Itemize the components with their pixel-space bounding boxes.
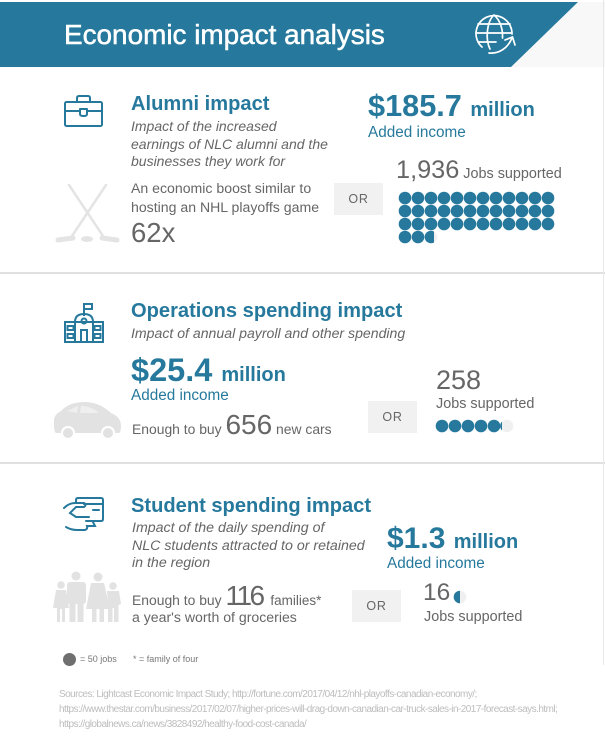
comparison text: Enough to buy 656 new cars: [132, 409, 332, 440]
title: Economic impact analysis: [64, 19, 385, 50]
or badge: [352, 590, 401, 622]
heading: Student spending impact: [131, 495, 371, 517]
stat: jobs count: 258: [436, 365, 481, 395]
description: businesses they work for: [131, 153, 285, 169]
icon: globe with arrow: [475, 14, 516, 54]
stat: jobs count: 16: [423, 579, 450, 606]
icon: car: [54, 402, 121, 438]
legend text: = 50 jobs: [80, 654, 117, 664]
footnote: * = family of four: [133, 654, 198, 664]
label: added income: Added income: [387, 555, 485, 572]
icon: school building: [64, 303, 104, 343]
description: Impact of annual payroll and other spending: [131, 325, 405, 341]
comparison text: An economic boost similar to: [131, 180, 311, 196]
or badge: OR: [348, 192, 369, 206]
header banner: [0, 2, 578, 67]
sources: [59, 689, 557, 730]
stat: added income: $25.4 million: [131, 352, 286, 388]
description: in the region: [132, 555, 210, 571]
description: [131, 118, 328, 169]
comparison text line two: a year's worth of groceries: [132, 609, 297, 625]
description: earnings of NLC alumni and the: [131, 136, 328, 152]
dot chart: jobs: [454, 590, 466, 604]
icon: hockey sticks: [56, 184, 120, 242]
icon: hand with card: [63, 497, 104, 531]
panel: alumni impact: [56, 88, 562, 248]
stat: 62x: 62x: [131, 217, 175, 248]
description: Impact of the increased: [131, 118, 277, 134]
label: added income: Added income: [131, 387, 229, 404]
or badge: [368, 401, 417, 433]
label: added income: Added income: [368, 124, 466, 141]
legend dot: [63, 653, 76, 666]
dot chart: jobs: [436, 420, 514, 432]
description: [132, 520, 365, 571]
legend: [63, 653, 198, 666]
stat: jobs supported: 1,936 Jobs supported: [396, 156, 562, 184]
comparison text: hosting an NHL playoffs game: [131, 199, 319, 215]
description: NLC students attracted to or retained: [132, 538, 365, 554]
panel: student spending impact: [53, 495, 522, 625]
heading: Alumni impact: [131, 93, 269, 115]
sources: Sources: Lightcast Economic Impact Study; http://fortune.com/2017/04/12/nhl-playoffs-canadian-economy/;: [59, 689, 477, 700]
or badge: OR: [366, 599, 387, 613]
dot chart: jobs: [398, 192, 554, 244]
stat: added income: $185.7 million: [368, 88, 535, 123]
icon: family: [53, 572, 121, 622]
comparison text: [131, 180, 319, 215]
or badge: OR: [382, 410, 403, 424]
sources: https://globalnews.ca/news/3828492/healthy-food-cost-canada/: [59, 719, 306, 730]
heading: Operations spending impact: [131, 300, 402, 322]
sources: https://www.thestar.com/business/2017/02/07/higher-prices-will-drag-down-canadian-car-truck-sales-in-2017-forecast-says.html;: [59, 704, 557, 715]
icon: briefcase: [64, 95, 103, 127]
description: Impact of the daily spending of: [132, 520, 324, 536]
or badge: [334, 183, 383, 215]
label: jobs supported: Jobs supported: [436, 396, 534, 412]
label: jobs supported: Jobs supported: [424, 609, 522, 625]
stat: added income: $1.3 million: [387, 522, 518, 555]
panel: operations spending impact: [54, 300, 534, 440]
comparison text: Enough to buy 116 families*: [132, 580, 321, 611]
